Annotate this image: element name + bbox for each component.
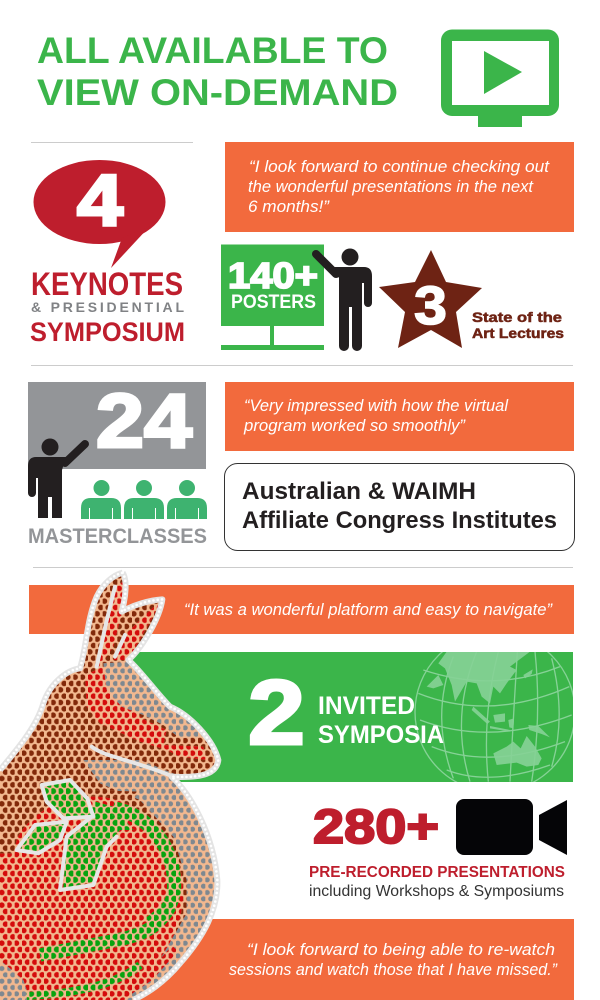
quote 1: the wonderful presentations in the next	[248, 177, 534, 196]
icon: speech bubble with 4: 4	[77, 161, 123, 241]
icon: speech bubble with 4	[34, 160, 166, 268]
red lower body dots	[0, 797, 183, 1000]
invited symposia band: INVITED	[318, 692, 415, 720]
quote 3: “It was a wonderful platform and easy to navigate”	[184, 600, 553, 619]
state of the art lectures	[379, 250, 564, 348]
congress institutes box: Affiliate Congress Institutes	[242, 507, 557, 534]
quote 1: 6 months!”	[248, 197, 330, 216]
red outer belly arc dots	[117, 948, 175, 999]
gray snout dots	[103, 662, 203, 738]
quote 2: program worked so smoothly”	[243, 416, 466, 435]
poster board	[221, 244, 324, 350]
light outline band	[0, 573, 218, 1000]
congress institutes box	[224, 464, 574, 550]
pre-recorded presentations	[309, 799, 567, 900]
quote 2	[225, 382, 574, 451]
pre-recorded presentations: PRE-RECORDED PRESENTATIONS	[309, 864, 565, 881]
red ear and face dots	[85, 580, 207, 760]
icon: presenter	[316, 248, 372, 351]
icon: audience	[81, 480, 207, 519]
keynotes label: SYMPOSIUM	[30, 317, 185, 347]
pre-recorded presentations: 280+	[313, 801, 439, 854]
title	[37, 30, 398, 113]
keynotes label: KEYNOTES	[31, 266, 183, 302]
poster board: 140+	[228, 255, 318, 296]
pre-recorded presentations: including Workshops & Symposiums	[309, 883, 564, 900]
globe	[414, 652, 573, 782]
title: ALL AVAILABLE TO	[37, 30, 388, 71]
quote 1: “I look forward to continue checking out	[249, 157, 550, 176]
gray chest and belly dots	[84, 760, 214, 1000]
invited symposia band: SYMPOSIA	[318, 721, 444, 749]
invited symposia band: 2	[248, 662, 305, 764]
icon: play monitor	[441, 30, 559, 127]
icon: star with 3	[379, 250, 482, 348]
quote 2: “Very impressed with how the virtual	[244, 396, 509, 415]
quote 4	[120, 919, 574, 1000]
quote 1	[225, 142, 574, 232]
poster board: POSTERS	[231, 291, 316, 313]
keynotes block	[30, 160, 185, 347]
gray lower-left corner dots	[0, 962, 27, 1000]
kangaroo dot painting	[0, 560, 233, 1000]
congress institutes box: Australian & WAIMH	[242, 478, 476, 505]
brown back and neck dots	[0, 576, 214, 962]
icon: teacher	[28, 438, 85, 518]
icon: star with 3: 3	[414, 276, 447, 336]
masterclasses panel: 24	[96, 379, 192, 464]
icon: video camera	[456, 799, 567, 855]
invited symposia band	[132, 652, 573, 782]
quote 4: “I look forward to being able to re-watch	[247, 940, 555, 959]
white outline dots	[0, 573, 218, 1000]
posters panel	[221, 244, 372, 351]
keynotes label	[30, 266, 185, 347]
title: VIEW ON-DEMAND	[37, 72, 398, 113]
green leaves, hook and apple ring dots	[21, 780, 174, 996]
masterclasses panel: MASTERCLASSES	[28, 525, 207, 548]
quote 3	[29, 585, 574, 634]
white dotted inner lines	[17, 587, 173, 890]
masterclasses panel	[28, 379, 207, 548]
quote 4: sessions and watch those that I have missed.”	[229, 960, 558, 979]
keynotes label: & PRESIDENTIAL	[31, 299, 184, 315]
brown patch over shoulder	[0, 777, 140, 853]
state of the art lectures: Art Lectures	[472, 326, 564, 341]
state of the art lectures: State of the	[472, 310, 563, 325]
